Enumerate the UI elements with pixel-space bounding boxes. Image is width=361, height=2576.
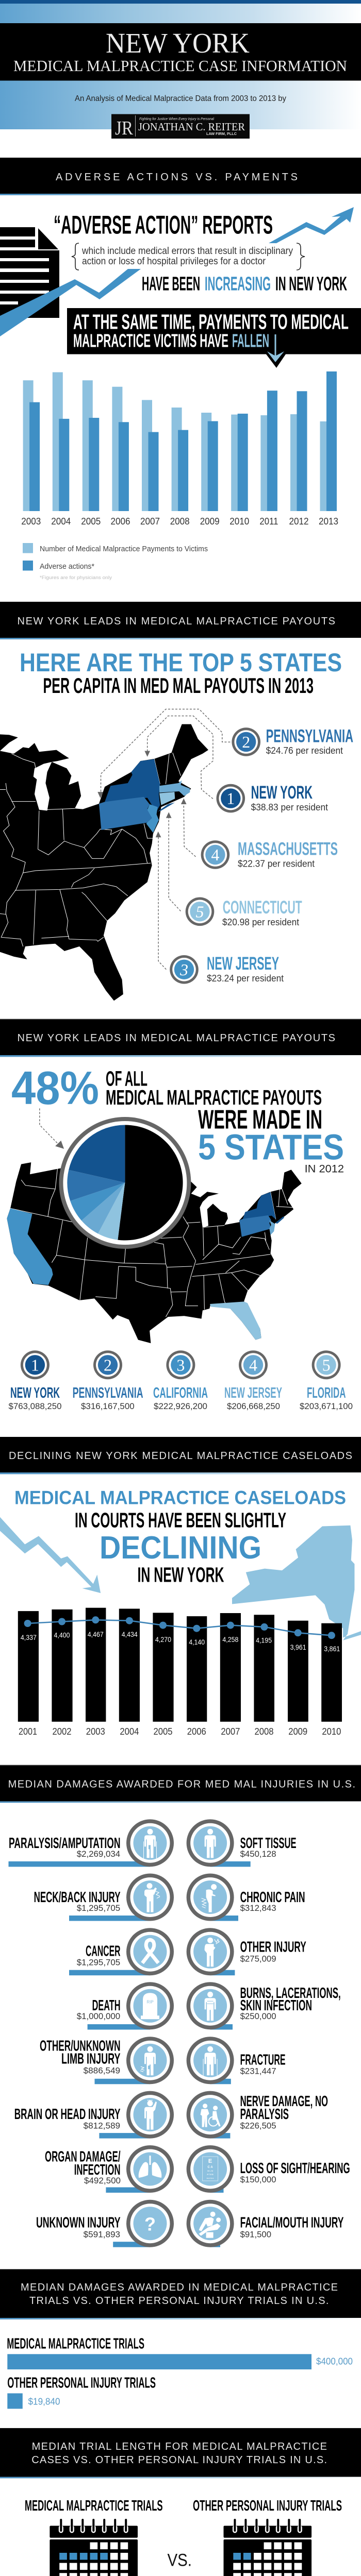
state totals row [8,1350,353,1411]
title [13,27,347,75]
rank: Connecticut: $20.98 per resident [222,917,299,927]
value labels: 4,258 [222,1635,239,1643]
rank: New York [217,783,328,812]
injury: burns, lacerations [187,1982,341,2029]
icon: rising zigzag arrow [0,207,354,336]
New York [105,759,175,811]
year labels [19,1726,341,1737]
injury: organ damage [45,2145,174,2193]
New Jersey [146,804,159,833]
icon: falling zigzag arrow [0,1517,101,1593]
heading: caseloads declining: MEDICAL MALPRACTICE CASELOADS [14,1487,346,1509]
value labels: 4,140 [189,1638,205,1646]
bar chart: median trial damages: $19,840 [28,2397,60,2407]
icon: report document [0,227,59,318]
year axis labels: 2012 [289,516,308,527]
New York [243,1192,284,1224]
callout: payments have fallen: MALPRACTICE VICTIMS HAVE [73,330,228,351]
injury: fracture: FRACTURE [240,2052,286,2068]
injury: other injury: OTHER INJURY [240,1939,306,1956]
section band: damages med mal vs other trials: TRIALS VS. OTHER PERSONAL INJURY TRIALS IN U.S. [29,2295,329,2307]
heading: 48 percent of payouts in 5 states: IN 2012 [305,1163,344,1175]
section band: NY leads in payouts: NEW YORK LEADS IN MEDICAL MALPRACTICE PAYOUTS [18,616,335,627]
section band: median damages by injury [0,1765,361,1803]
injury: loss of sight/hearing: C A [208,2166,213,2169]
Great Lakes cut-outs [34,762,52,811]
injury: organ damage: INFECTION [74,2162,121,2178]
injury: cancer: $1,295,705 [77,1957,120,1967]
total: California: CALIFORNIA [153,1385,208,1401]
injury: loss of sight/hearing: $150,000 [240,2175,276,2184]
year axis labels: 2009 [200,516,220,527]
rank: Pennsylvania [232,726,353,756]
Massachusetts [159,781,190,796]
injury: chronic pain: $312,843 [240,1903,276,1913]
injury: limb injury [40,2037,174,2084]
total: New Jersey [224,1350,282,1411]
section band: NY leads in payouts (2): NEW YORK LEADS IN MEDICAL MALPRACTICE PAYOUTS [18,1032,335,1044]
section band: damages med mal vs other trials [0,2269,361,2319]
year axis labels: 2004 [51,516,71,527]
rank: New Jersey: 3 [179,960,188,979]
total: California [153,1350,208,1411]
value labels: 3,961 [290,1643,306,1651]
injury: neck/back: $1,295,705 [77,1903,120,1913]
year axis labels: 2003 [21,516,41,527]
dashed arrow: 48 percent to pie [40,1108,64,1149]
injury: unknown: UNKNOWN INJURY [36,2215,121,2231]
total: New York: 1 [31,1355,39,1374]
section band: adverse actions vs payments [0,158,361,195]
New Jersey [269,1221,275,1235]
map: eastern United States [0,724,208,1001]
rank: New York: 1 [226,789,235,808]
rank: Connecticut [186,897,302,927]
map: contiguous United States with top 5 states [7,1162,302,1343]
value labels: 3,861 [324,1645,340,1653]
chart legend: Number of Medical Malpractice Payments to Victims [40,545,208,553]
icon: calendar 5 days [50,2520,138,2576]
rank: Connecticut: 5 [196,902,204,921]
callout: payments have fallen: FALLEN [232,330,269,351]
rank: Pennsylvania: 2 [242,733,250,751]
rank: New Jersey: NEW JERSEY [207,954,279,974]
year axis labels: 2006 [110,516,130,527]
California [7,1208,53,1285]
total: Pennsylvania: PENNSYLVANIA [73,1385,143,1401]
injury: facial/mouth: $91,500 [240,2230,271,2239]
total: Florida: $203,671,100 [300,1401,353,1411]
subtitle: An Analysis of Medical Malpractice Data from 2003 to 2013 by [75,94,286,103]
injury: soft tissue [187,1819,297,1867]
year axis labels: 2010 [229,516,249,527]
injury: nerve damage: PARALYSIS [240,2106,289,2123]
injury: cancer: CANCER [86,1943,121,1959]
total: New York: NEW YORK [10,1385,60,1401]
section band: damages med mal vs other trials: MEDIAN DAMAGES AWARDED IN MEDICAL MALPRACTICE [21,2282,338,2293]
total: New York [8,1350,62,1411]
Pennsylvania [99,797,152,830]
section band: median damages by injury: MEDIAN DAMAGES AWARDED FOR MED MAL INJURIES IN U.S. [8,1779,355,1790]
heading: have been increasing: HAVE BEEN [142,273,200,295]
vs label: VS. [167,2551,192,2570]
year axis labels: 2007 [140,516,160,527]
injury: death: DEATH [92,1997,121,2014]
text block: definition in braces [72,243,305,270]
total: Pennsylvania: 2 [104,1355,112,1374]
logo: Jonathan C. Reiter law firm: JONATHAN C. REITER [138,121,245,133]
total: New York: $763,088,250 [8,1401,62,1411]
injury: paralysis/amputation: $2,269,034 [77,1849,120,1859]
chart legend: *Figures are for physicians only [40,575,112,580]
total: Florida: 5 [322,1355,331,1374]
injury: loss of sight/hearing [187,2145,350,2193]
injury: facial/mouth [187,2200,343,2247]
heading: 48 percent of payouts in 5 states: OF ALL [106,1066,147,1090]
year labels: 2010 [322,1726,341,1737]
year labels: 2004 [120,1726,139,1737]
heading: have been increasing: INCREASING [205,273,271,295]
heading: 48 percent of payouts in 5 states: 48% [11,1062,99,1114]
bar chart: median trial damages: MEDICAL MALPRACTICE TRIALS [7,2336,144,2352]
bars: adverse actions [29,371,337,511]
text block: definition in braces: which include medical errors that result in disciplinary [81,246,293,257]
value labels: 4,195 [256,1636,272,1645]
map: New York state silhouette [232,1526,361,1640]
injury: death: RIP [146,1999,154,2004]
injury: loss of sight/hearing: R H T R A [207,2177,214,2179]
injury: loss of sight/hearing: P T E R [207,2174,214,2176]
bars [18,1608,342,1722]
injury: brain or head: BRAIN OR HEAD INJURY [14,2106,121,2123]
year labels: 2002 [53,1726,71,1737]
total: Florida [300,1350,353,1411]
rank: New York: $38.83 per resident [251,802,328,812]
text block: definition in braces: action or loss of hospital privileges for a doctor [82,256,266,267]
chart legend [23,543,208,580]
Florida [210,1301,261,1340]
injury: cancer [77,1928,174,1975]
Pennsylvania [239,1215,271,1237]
injury: paralysis/amputation: PARALYSIS/AMPUTATION [9,1835,121,1852]
trial length: medical malpractice [25,2498,163,2576]
section band: median trial length [0,2428,361,2478]
header banner [0,0,361,139]
injury: limb injury: $886,549 [84,2066,120,2076]
section band: median trial length: MEDIAN TRIAL LENGTH FOR MEDICAL MALPRACTICE [32,2441,327,2452]
year axis labels [21,516,338,527]
year labels: 2001 [19,1726,37,1737]
injury: brain or head [14,2091,174,2139]
title: MEDICAL MALPRACTICE CASE INFORMATION [13,57,347,75]
injury: other injury [187,1928,306,1975]
heading: have been increasing [142,273,347,295]
injury: fracture [187,2037,286,2084]
section band: declining caseloads [0,1437,361,1474]
year labels: 2008 [255,1726,273,1737]
heading: 48 percent of payouts in 5 states [11,1062,344,1175]
year axis labels: 2011 [259,516,278,527]
section band: NY leads in payouts [0,602,361,639]
trial length: medical malpractice: MEDICAL MALPRACTICE TRIALS [25,2498,163,2514]
rank: New Jersey [170,954,284,984]
Connecticut [159,792,175,805]
year axis labels: 2008 [170,516,190,527]
heading: 48 percent of payouts in 5 states: 5 STATES [198,1127,344,1167]
injury: neck/back [34,1873,174,1921]
injury: unknown: $591,893 [84,2230,120,2239]
bar chart: median trial damages [7,2336,353,2409]
section band: NY leads in payouts (2) [0,1019,361,1057]
trial length: other personal injury [193,2498,342,2576]
value labels [21,1630,340,1653]
injury: chronic pain [187,1873,305,1921]
rank: New York: NEW YORK [251,783,313,803]
heading: caseloads declining: IN NEW YORK [137,1563,224,1587]
logo: Jonathan C. Reiter law firm: Fighting for Justice When Every Injury is Personal [139,117,214,121]
rank: Massachusetts: $22.37 per resident [238,858,315,869]
trend line [24,1616,335,1639]
injury damages: award bars [8,1861,251,2247]
injury: organ damage: ORGAN DAMAGE/ [45,2149,121,2165]
injury: death: $1,000,000 [77,2011,120,2021]
year axis labels: 2005 [81,516,101,527]
injury: death [77,1982,174,2029]
injury: limb injury: LIMB INJURY [61,2051,121,2067]
icon: calendar 2 days [224,2520,311,2576]
heading: caseloads declining: DECLINING [100,1530,261,1566]
total: California: $222,926,200 [154,1401,207,1411]
value labels: 4,337 [21,1633,37,1641]
injury: organ damage: $492,500 [84,2176,121,2185]
value labels: 4,400 [54,1631,70,1639]
year labels: 2003 [86,1726,105,1737]
injury: burns, lacerations: SKIN INFECTION [240,1997,312,2014]
injury: paralysis/amputation [9,1819,174,1867]
chart legend: Adverse actions* [40,562,94,571]
rank: Massachusetts [201,839,338,869]
callout: payments have fallen [67,308,361,368]
total: New Jersey: NEW JERSEY [224,1385,282,1401]
year labels: 2005 [154,1726,172,1737]
year axis labels: 2013 [319,516,338,527]
total: Pennsylvania [73,1350,143,1411]
injury: unknown [36,2200,174,2247]
injury: limb injury: OTHER/UNKNOWN [40,2038,121,2055]
heading: caseloads declining [14,1487,346,1587]
value labels: 4,467 [88,1630,104,1638]
injury: unknown: ? [144,2214,156,2235]
injury: soft tissue: SOFT TISSUE [240,1835,297,1852]
bars: payments to victims [23,372,331,511]
logo: Jonathan C. Reiter law firm: LAW FIRM, PLLC [206,132,237,136]
injury: nerve damage: $226,505 [240,2121,276,2130]
injury: loss of sight/hearing: D L N [207,2170,213,2172]
injury: neck/back: NECK/BACK INJURY [34,1889,121,1906]
total: Pennsylvania: $316,167,500 [81,1401,135,1411]
injury: brain or head: $812,589 [84,2121,120,2130]
injury: fracture: $231,447 [240,2066,276,2076]
title: NEW YORK [106,27,250,59]
year labels: 2006 [187,1726,206,1737]
bar chart: median trial damages: OTHER PERSONAL INJURY TRIALS [7,2375,156,2392]
year labels: 2009 [288,1726,307,1737]
total: California: 3 [176,1355,185,1374]
bar chart: median trial damages: $400,000 [316,2357,353,2367]
rank: New Jersey: $23.24 per resident [207,973,284,984]
year labels: 2007 [221,1726,240,1737]
value labels: 4,270 [155,1635,171,1643]
dashed connector arrows to states [97,709,230,970]
heading: top 5 states [20,648,342,698]
injury: burns, lacerations: $250,000 [240,2011,276,2021]
logo: Jonathan C. Reiter law firm: JR [115,117,134,139]
bar chart: payments vs adverse actions [21,371,338,527]
total: New Jersey: 4 [249,1355,257,1374]
state border lines [0,753,180,946]
section band: declining caseloads: DECLINING NEW YORK MEDICAL MALPRACTICE CASELOADS [9,1450,352,1462]
injury: nerve damage [187,2091,328,2139]
injury: soft tissue: $450,128 [240,1849,276,1859]
pie chart: share of top 5 states [59,1117,191,1249]
rank: Connecticut: CONNECTICUT [223,897,302,918]
rank: Pennsylvania: $24.76 per resident [266,745,343,756]
value labels: 4,434 [122,1630,138,1638]
total: New Jersey: $206,668,250 [227,1401,280,1411]
section band: median trial length: CASES VS. OTHER PERSONAL INJURY TRIALS IN U.S. [31,2454,327,2466]
section band: adverse actions vs payments: ADVERSE ACTIONS VS. PAYMENTS [56,172,298,183]
rank: Massachusetts: 4 [211,845,219,864]
injury: loss of sight/hearing: E [208,2158,212,2164]
state border lines [10,1168,292,1317]
bar and line chart: caseload by year [18,1608,342,1737]
injury: other injury: $275,009 [240,1954,276,1964]
injury: chronic pain: CHRONIC PAIN [240,1889,305,1906]
logo: Jonathan C. Reiter law firm [111,114,250,139]
